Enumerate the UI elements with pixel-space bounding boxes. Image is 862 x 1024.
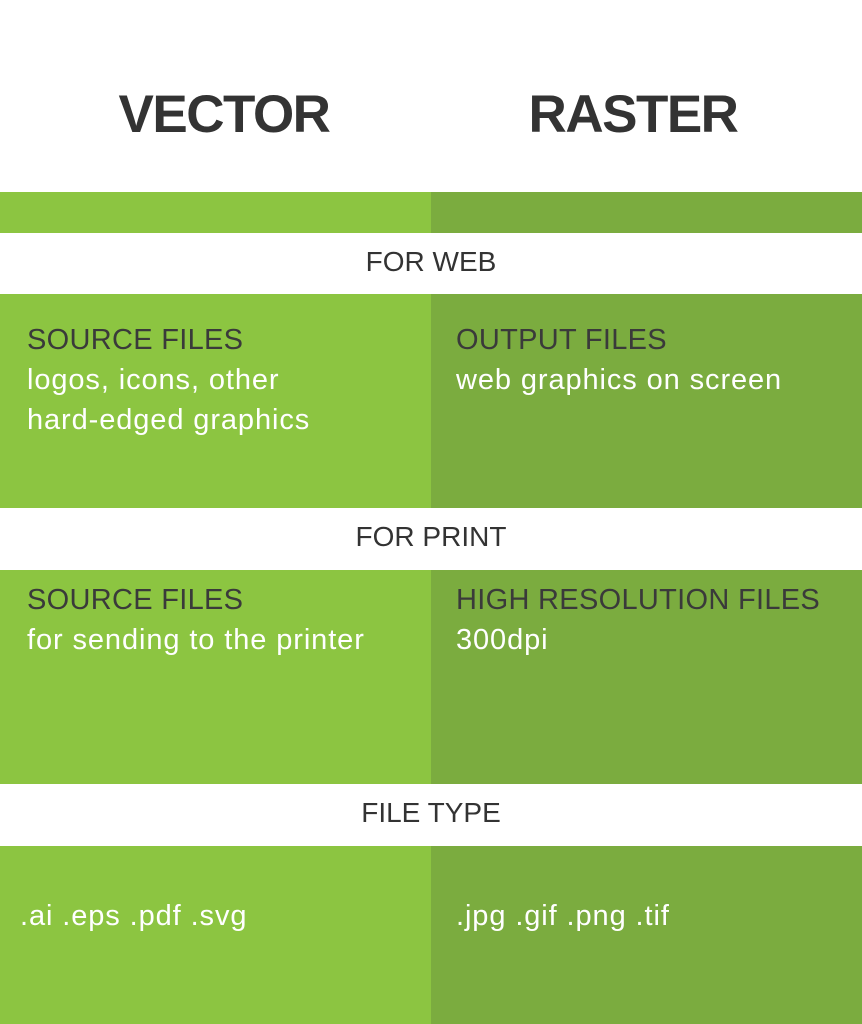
text: vector print: for sending to the printer — [27, 624, 365, 656]
panel: vector web — [0, 294, 431, 508]
panel: vector file types — [0, 846, 431, 1024]
panel: raster file types — [431, 846, 862, 1024]
title: vector: VECTOR — [119, 85, 329, 144]
title: raster: RASTER — [529, 85, 737, 144]
text: vector types: .ai .eps .pdf .svg — [20, 900, 247, 932]
heading: file type: FILE TYPE — [361, 797, 501, 828]
panel: raster web — [431, 294, 862, 508]
text: raster print: HIGH RESOLUTION FILES — [456, 584, 820, 616]
text: raster print: 300dpi — [456, 624, 548, 656]
text: vector web — [27, 324, 310, 436]
text: vector web: logos, icons, other — [27, 364, 279, 396]
text: vector print: SOURCE FILES — [27, 584, 243, 616]
header band left — [0, 192, 431, 233]
text: vector web: SOURCE FILES — [27, 324, 243, 356]
panel: raster print — [431, 570, 862, 784]
text: raster web: web graphics on screen — [456, 364, 782, 396]
heading: for print: FOR PRINT — [356, 521, 506, 552]
heading: for web: FOR WEB — [366, 246, 496, 277]
text: raster web — [456, 324, 782, 396]
text: vector web: hard-edged graphics — [27, 404, 310, 436]
panel: vector print — [0, 570, 431, 784]
text: raster print — [456, 584, 820, 656]
text: vector print — [27, 584, 365, 656]
text: raster web: OUTPUT FILES — [456, 324, 667, 356]
header band right — [431, 192, 862, 233]
text: raster types: .jpg .gif .png .tif — [456, 900, 670, 932]
